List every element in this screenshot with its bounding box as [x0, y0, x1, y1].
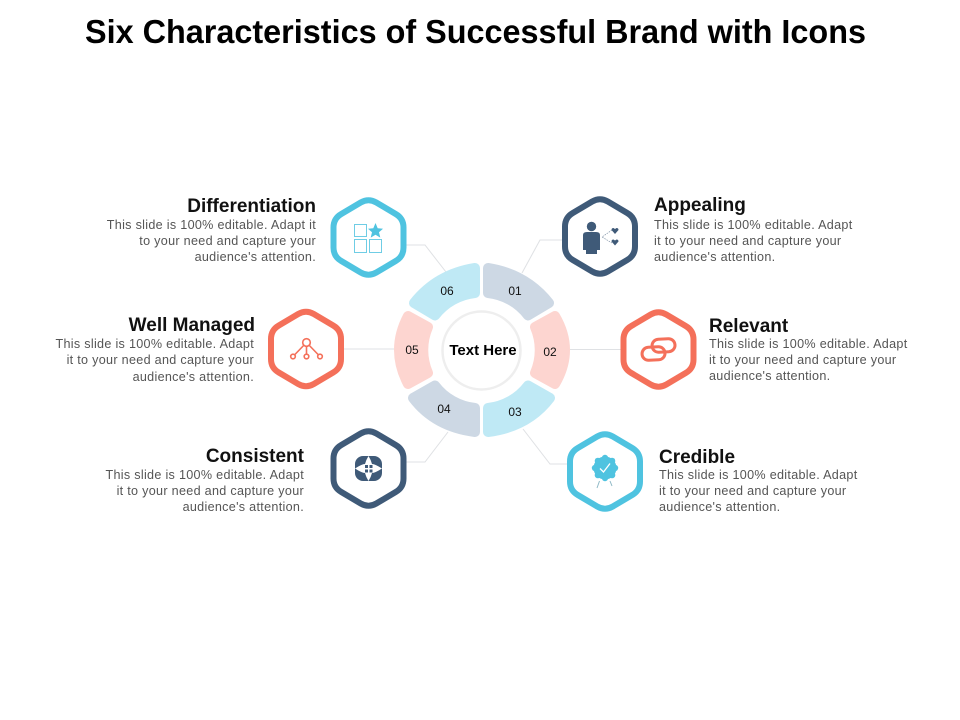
hexagon: Consistent	[334, 431, 404, 506]
segment 02: 02	[543, 345, 557, 359]
title: Six Characteristics of Successful Brand with Icons	[85, 13, 866, 50]
text: Appealing description: This slide is 100% editable. Adapt	[654, 218, 853, 232]
hexagon: Credible	[570, 434, 640, 509]
text: Well Managed description: it to your need and capture your	[67, 353, 254, 367]
text: Appealing description	[654, 218, 853, 264]
item: Credible	[570, 434, 858, 514]
center circle: Text Here	[449, 342, 517, 359]
hexagon: Differentiation	[334, 200, 404, 275]
heading: Differentiation: Differentiation	[187, 196, 316, 217]
icon: chain link	[642, 338, 675, 361]
segment 05: 05	[405, 343, 419, 357]
segment 02	[535, 316, 565, 384]
segment 06	[414, 268, 475, 316]
text: Appealing description: it to your need and capture your	[654, 234, 841, 248]
heading: Consistent: Consistent	[206, 446, 305, 467]
text: Consistent description: audience's attention.	[183, 500, 304, 514]
heading: Appealing: Appealing	[654, 195, 746, 216]
item: Appealing	[565, 195, 853, 274]
connector lines	[343, 240, 622, 464]
icon: person with hearts	[583, 222, 618, 254]
heading: Relevant: Relevant	[709, 316, 789, 337]
segment 05	[399, 316, 428, 384]
text: Credible description: audience's attention.	[659, 500, 780, 514]
heading: Well Managed: Well Managed	[129, 315, 255, 336]
center circle	[442, 312, 520, 390]
text: Consistent description	[105, 468, 304, 514]
hexagon: Appealing	[565, 199, 635, 274]
text: Relevant description: audience's attention.	[709, 369, 830, 383]
text: Relevant description: This slide is 100% editable. Adapt	[709, 337, 908, 351]
item: Consistent	[105, 431, 404, 514]
text: Relevant description: it to your need and capture your	[709, 353, 896, 367]
item: Well Managed	[55, 312, 341, 386]
text: Credible description	[659, 468, 858, 514]
text: Credible description: This slide is 100% editable. Adapt	[659, 468, 858, 482]
hexagon: Well Managed	[271, 312, 341, 386]
text: Consistent description: it to your need and capture your	[117, 484, 304, 498]
segment 03: 03	[508, 405, 522, 419]
text: Differentiation description: to your need and capture your	[139, 234, 316, 248]
segment 01	[488, 268, 549, 316]
center wheel	[399, 268, 565, 432]
hexagon: Relevant	[624, 312, 694, 387]
text: Appealing description: audience's attention.	[654, 250, 775, 264]
segment 03	[488, 386, 550, 432]
text: Well Managed description: This slide is 100% editable. Adapt	[55, 337, 254, 351]
icon: hierarchy nodes	[291, 339, 322, 359]
segment 06: 06	[440, 284, 454, 298]
icon: verified badge	[592, 455, 618, 488]
icon: four petal emblem	[355, 456, 382, 481]
item: Relevant	[624, 312, 908, 387]
segment 04: 04	[437, 402, 451, 416]
text: Well Managed description: audience's attention.	[133, 370, 254, 384]
item: Differentiation	[107, 196, 404, 275]
text: Credible description: it to your need and capture your	[659, 484, 846, 498]
icon: squares and star	[354, 223, 383, 252]
segment 04	[413, 386, 475, 432]
text: Relevant description	[709, 337, 908, 383]
text: Differentiation description	[107, 218, 316, 264]
text: Consistent description: This slide is 100% editable. Adapt	[105, 468, 304, 482]
heading: Credible: Credible	[659, 447, 735, 468]
segment 01: 01	[508, 284, 522, 298]
text: Differentiation description: This slide is 100% editable. Adapt it	[107, 218, 316, 232]
text: Well Managed description	[55, 337, 254, 384]
text: Differentiation description: audience's attention.	[195, 250, 316, 264]
